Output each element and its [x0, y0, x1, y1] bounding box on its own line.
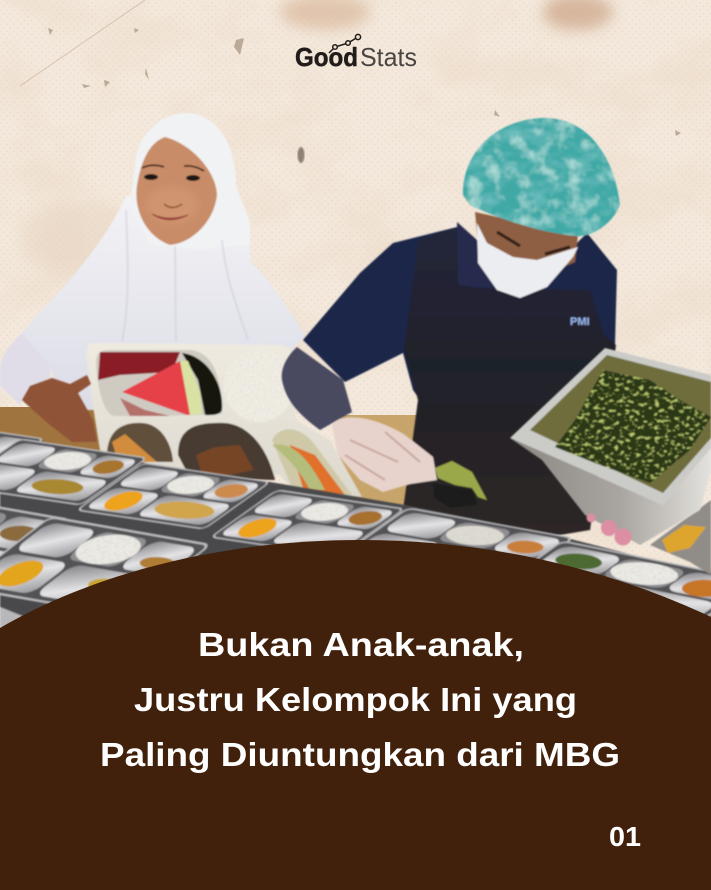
headline: [100, 626, 620, 773]
page number: 01: [609, 821, 641, 852]
pan interior: [530, 355, 711, 493]
headline line 3: Paling Diuntungkan dari MBG: [100, 736, 620, 773]
face: [475, 212, 578, 290]
eyebrows: [142, 165, 204, 171]
pan outer wall: [510, 438, 711, 545]
girl in white hijab: [0, 113, 305, 410]
watermelon slice: [122, 361, 200, 415]
tray C: [211, 490, 404, 556]
headline line 1: Bukan Anak-anak,: [198, 626, 524, 663]
steel pan of greens: [510, 348, 711, 546]
brown curved panel: [0, 540, 711, 890]
tray sliver bottom left: [0, 607, 25, 630]
logo wordmark: Good: Good: [295, 42, 358, 72]
lunch tray with watermelon: [86, 343, 362, 498]
collar: [457, 222, 493, 288]
fingers under pan: [586, 514, 632, 546]
food worker in hairnet: [282, 118, 620, 545]
logo chart line icon: [329, 34, 361, 53]
gloved hand: [332, 417, 437, 492]
face mask: [477, 223, 578, 298]
tray F: [496, 541, 711, 628]
nose: [164, 204, 182, 208]
tray far left top: [0, 420, 44, 486]
lower right compartment with vegetables: [272, 429, 352, 495]
paper background: [0, 0, 711, 640]
lower middle compartment with chicken: [178, 423, 275, 480]
headline line 2: Justru Kelompok Ini yang: [134, 681, 577, 718]
tray behind pan, right edge: [650, 500, 711, 575]
smile: [152, 214, 188, 220]
uniform and drape: [22, 195, 305, 410]
sleeve: [0, 333, 50, 405]
white tray body: [86, 343, 362, 498]
tray G: [0, 492, 70, 590]
girl's hand: [22, 375, 97, 442]
dark base under trays: [0, 432, 711, 640]
yellow side dish: [662, 525, 706, 553]
wooden table: [0, 407, 420, 505]
shirt: [303, 227, 617, 530]
eyes: [144, 174, 200, 181]
logo wordmark: Stats: Stats: [360, 42, 417, 72]
pan rim: [510, 348, 711, 505]
hijab head: [130, 113, 250, 250]
tray A: [0, 439, 147, 505]
meal trays in foreground: [0, 420, 711, 640]
scoop with vegetables: [433, 483, 478, 508]
face: [136, 137, 217, 245]
tray E: [342, 508, 573, 585]
rice compartment: [224, 350, 294, 422]
eyes: [497, 232, 570, 254]
greens: [555, 370, 711, 483]
hijab folds: [122, 210, 248, 342]
apron: [403, 227, 616, 545]
lower sleeve: [282, 347, 352, 430]
cheek highlight: [146, 187, 198, 223]
hairnet: [463, 118, 620, 236]
watermelon compartment: [96, 350, 222, 416]
tray D: [0, 517, 210, 615]
logo: GoodStats: [295, 34, 417, 72]
lower left compartment: [107, 423, 173, 462]
tray B: [77, 463, 270, 529]
shirt logo: PMI: [570, 316, 590, 328]
